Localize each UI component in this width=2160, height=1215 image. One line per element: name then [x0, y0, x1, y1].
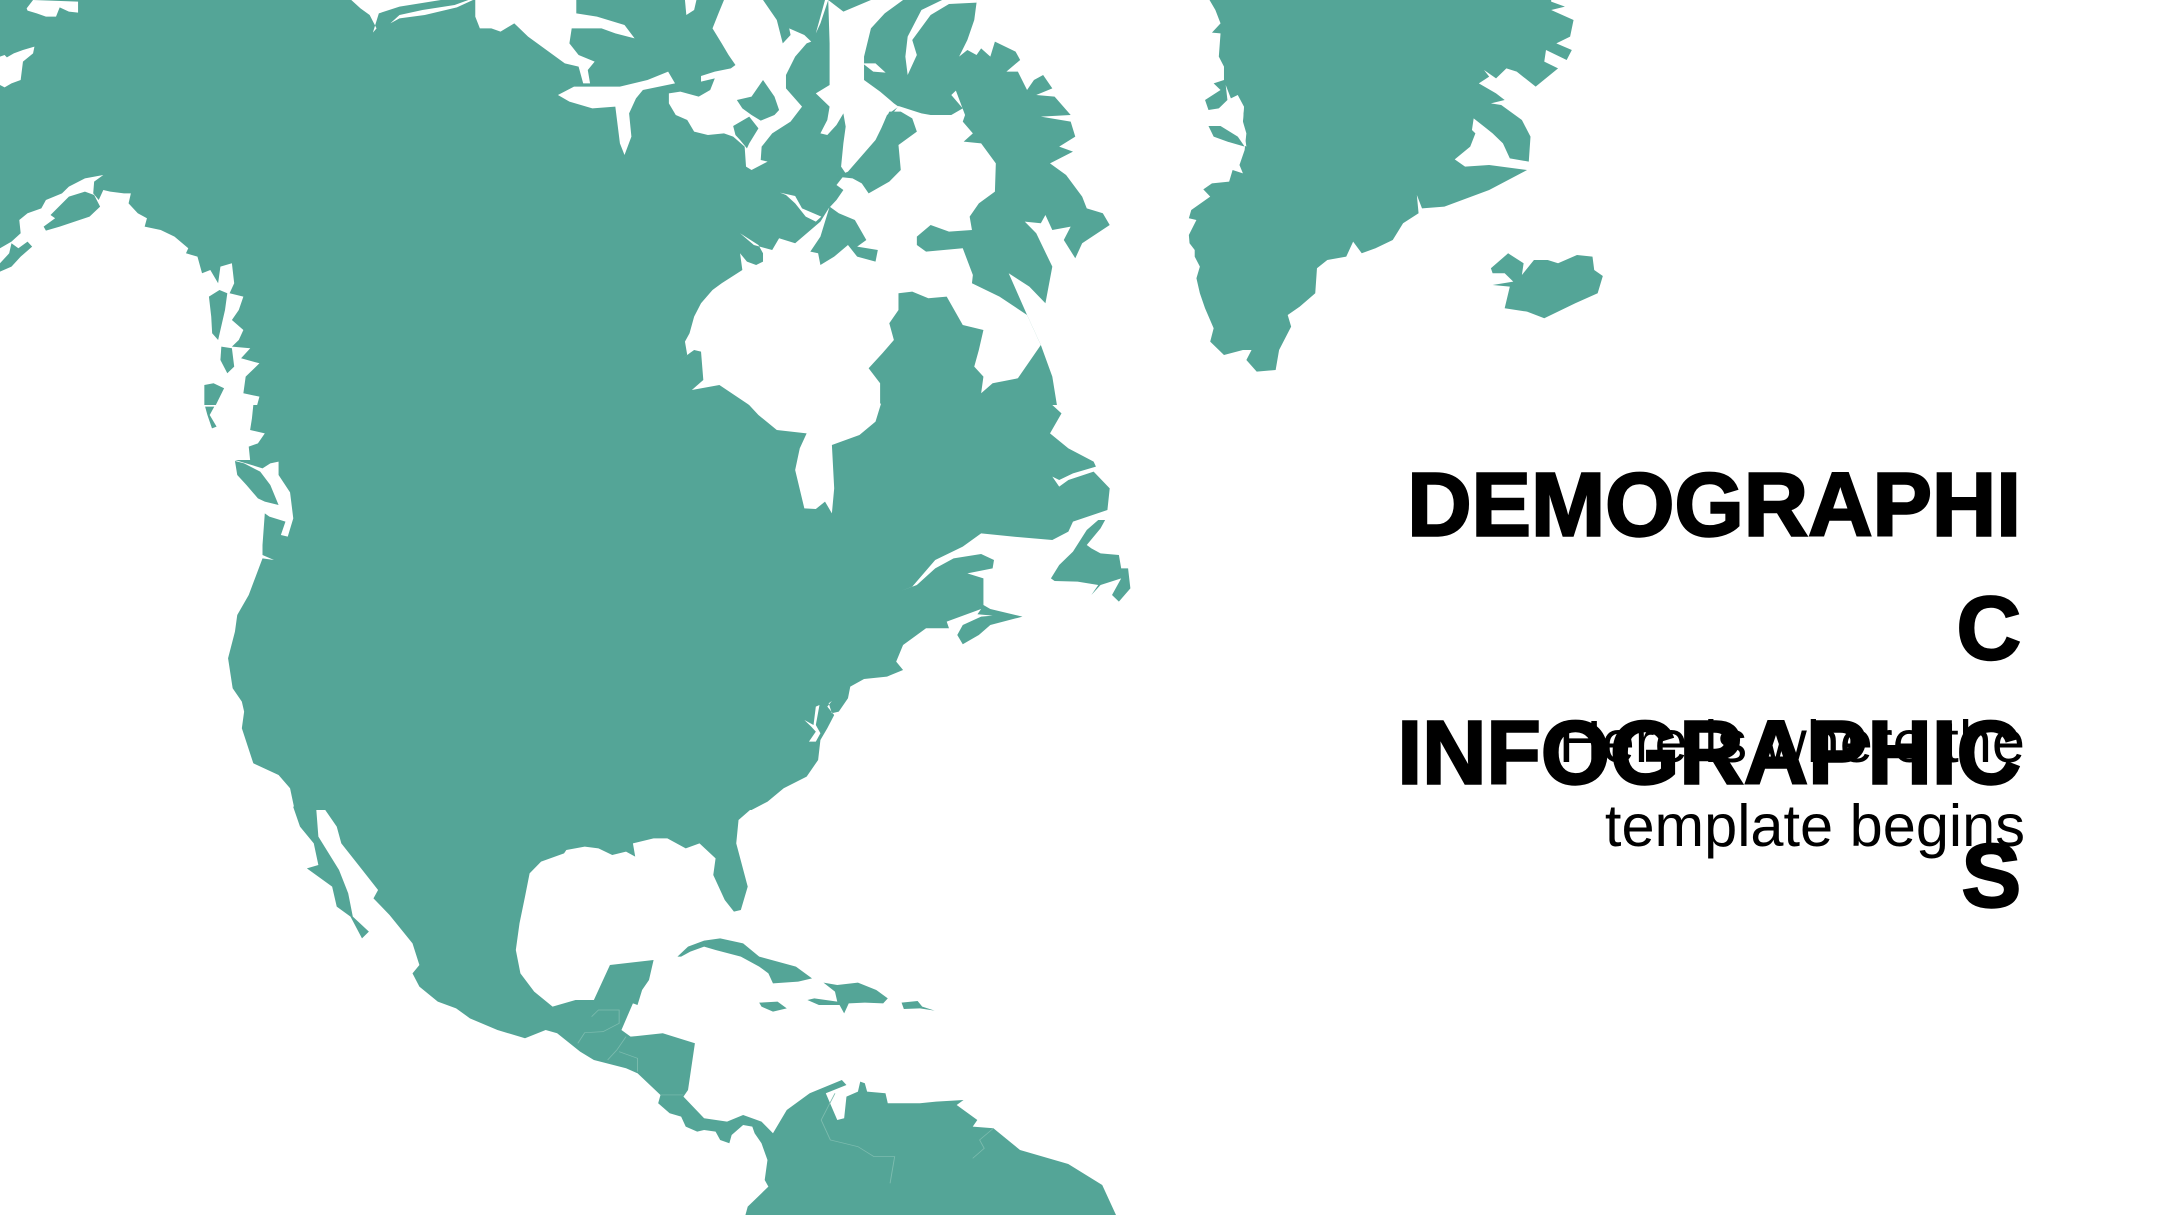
island: Hispaniola	[807, 983, 888, 1013]
island: Jamaica	[759, 1002, 787, 1012]
subtitle text: template begins	[1605, 792, 2025, 859]
island: Newfoundland	[1051, 520, 1130, 602]
island: Cuba	[677, 938, 812, 983]
peninsula: Boothia finger	[733, 117, 758, 148]
island: Puerto Rico	[902, 1001, 935, 1011]
map: North America	[0, 0, 1603, 1215]
island: Southampton	[810, 207, 878, 265]
island: Kenai peninsula	[44, 192, 100, 231]
islands: British Columbia coast south	[220, 347, 234, 373]
island: Haida Gwaii	[204, 383, 224, 405]
subtitle text	[1559, 708, 2025, 859]
title: C	[1957, 578, 2021, 678]
title	[1397, 454, 2021, 926]
peninsula: Melville	[836, 112, 917, 193]
title: DEMOGRAPHI	[1407, 454, 2021, 555]
island: Vancouver Island	[235, 461, 279, 505]
island: King William	[737, 80, 779, 121]
island: Haida Gwaii south	[205, 407, 217, 428]
island chain: Alaska peninsula	[0, 242, 32, 272]
title: INFOGRAPHIC	[1397, 702, 2021, 803]
islands: British Columbia coast north	[209, 290, 227, 340]
peninsula: Baja California	[293, 807, 369, 938]
subtitle text: Here is where the	[1559, 708, 2025, 775]
title: S	[1962, 825, 2021, 926]
landmass: Greenland	[1189, 0, 1574, 372]
landmass: Iceland	[1491, 253, 1603, 318]
